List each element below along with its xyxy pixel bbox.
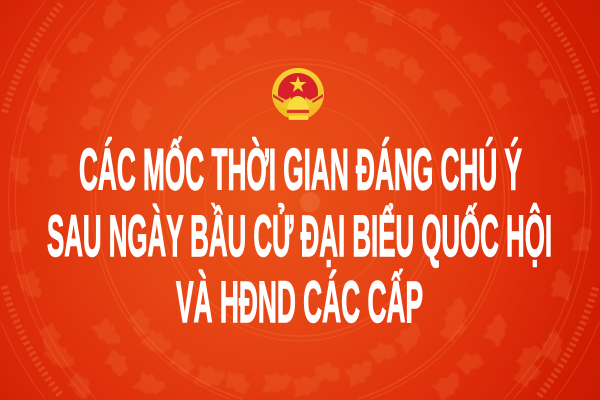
drum centre glow — [300, 192, 320, 212]
emblem: red disc — [278, 73, 318, 104]
emblem: side sheaves — [272, 93, 324, 108]
emblem: cogwheel — [287, 96, 309, 109]
emblem: gold wreath — [272, 68, 324, 117]
national emblem — [272, 68, 324, 120]
title — [47, 138, 552, 335]
emblem: ribbon — [281, 109, 315, 120]
emblem: star — [290, 76, 306, 92]
